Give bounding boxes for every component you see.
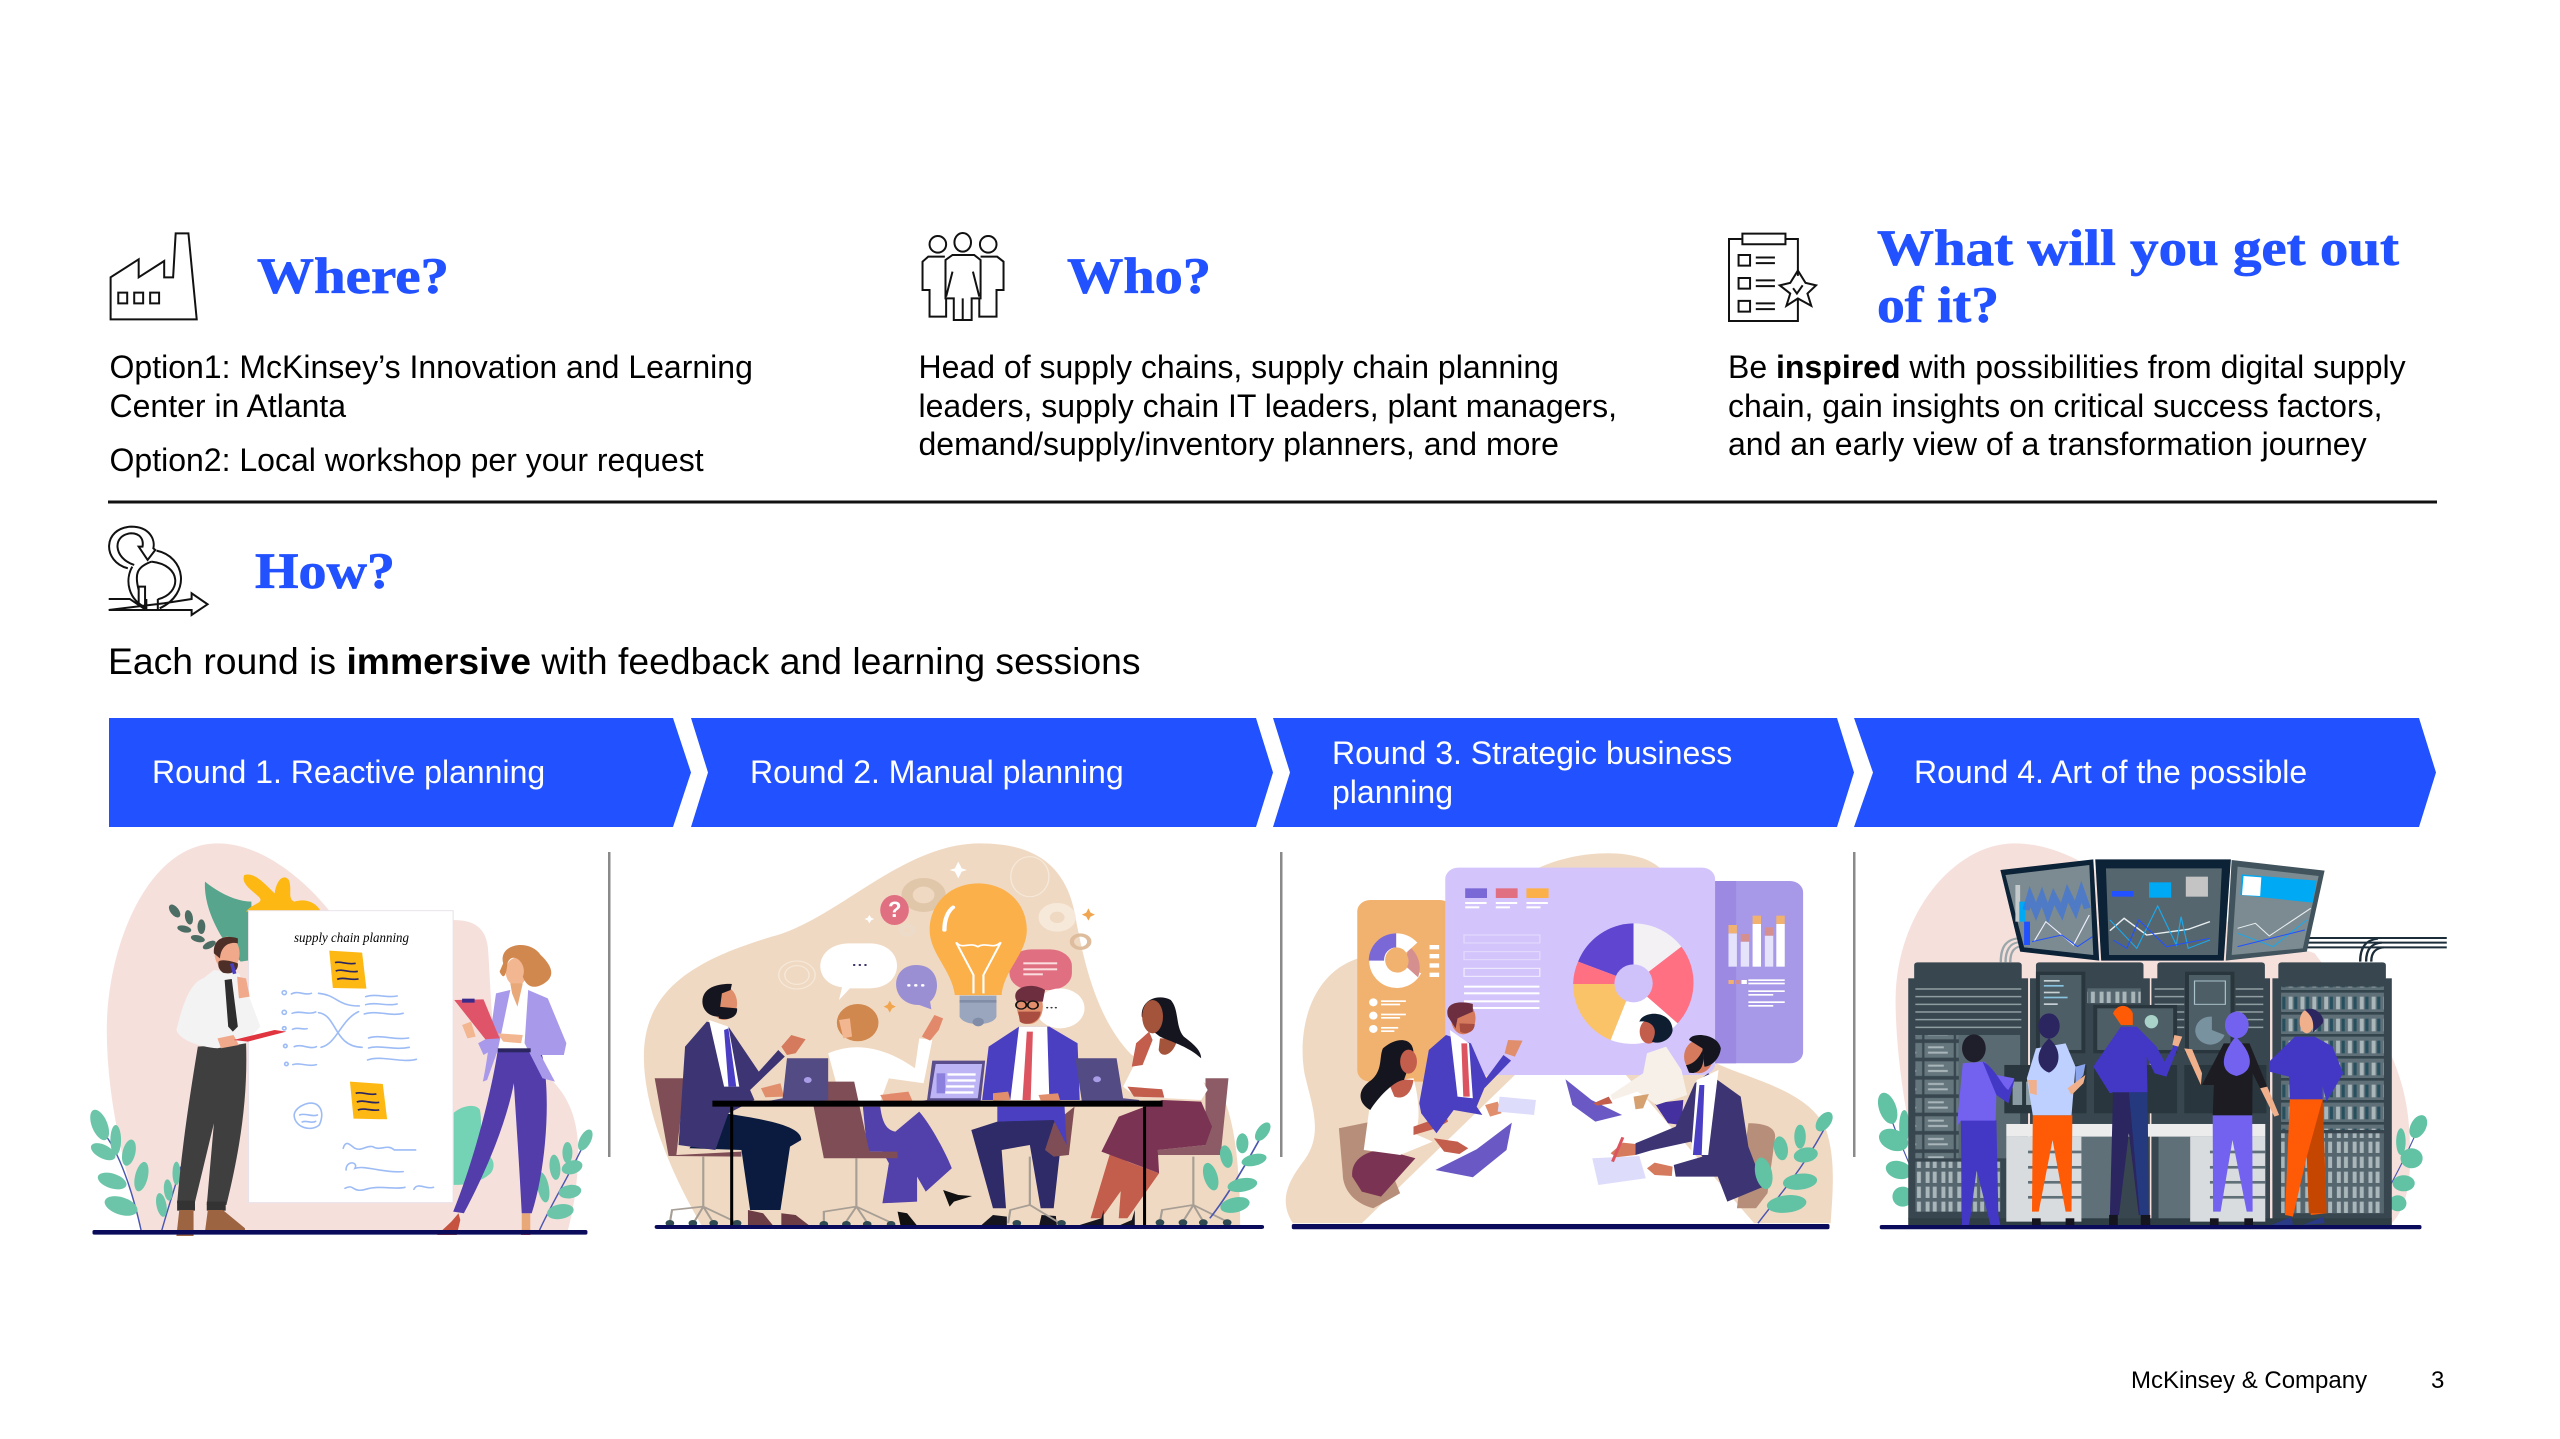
heading: what will you get out of it: of it? — [1877, 278, 1999, 334]
chevron: round 3 — [1273, 718, 1854, 827]
green leaves behind woman — [453, 1106, 494, 1185]
server racks — [1908, 962, 2392, 1226]
table occupants: right woman — [1080, 997, 1232, 1227]
icon: factory — [111, 233, 197, 319]
cables — [2001, 938, 2447, 962]
sparkles — [865, 862, 1095, 1013]
heading: who: Who? — [1067, 249, 1211, 305]
gears — [779, 882, 1089, 989]
woman with clipboard — [437, 945, 566, 1235]
right purple panel with bars — [1691, 881, 1803, 1063]
chevron: round 4 — [1854, 718, 2436, 827]
man standing left — [1419, 1002, 1536, 1133]
text block: who: demand/supply/inventory planners, and more — [918, 426, 1559, 462]
man with clipboard — [176, 937, 286, 1236]
laptops and papers — [1435, 1079, 1646, 1185]
table occupants: centre man — [971, 986, 1080, 1228]
person 3 — [2093, 1006, 2182, 1227]
left plant — [86, 1107, 181, 1232]
table occupants: left man — [655, 984, 809, 1227]
text: how description: Each round is immersive with feedback and learning sessions — [108, 640, 1141, 682]
beige background blob — [644, 843, 1240, 1227]
chevron: round 3: Round 3. Strategic business — [1332, 735, 1732, 771]
text block: where options: Option1: McKinsey’s Innovation and Learning — [110, 349, 753, 385]
text block: where options — [110, 349, 753, 478]
planning board — [249, 911, 453, 1203]
question mark: ? — [888, 897, 901, 922]
plant — [1752, 1109, 1836, 1223]
heading: what will you get out of it: What will you get out — [1877, 221, 2399, 277]
chevron: round 1: Round 1. Reactive planning — [152, 754, 545, 790]
white table — [1362, 1075, 1754, 1223]
laptops — [765, 1058, 1140, 1104]
table occupants: centre woman — [809, 1004, 972, 1228]
white console desk — [2006, 1124, 2265, 1222]
monitors — [2000, 859, 2325, 961]
ground line — [92, 1230, 587, 1235]
text block: what you get: chain, gain insights on critical success factors, — [1728, 388, 2383, 424]
plant — [1200, 1121, 1274, 1218]
illustration: round 4 art of the possible — [1874, 843, 2447, 1229]
board scribbles — [282, 991, 434, 1190]
table — [712, 1101, 1163, 1227]
woman right — [1593, 1014, 1687, 1125]
board title: supply chain planning — [294, 931, 409, 946]
icon: checklist with star — [1729, 234, 1816, 321]
right plant — [2368, 1113, 2431, 1227]
chevron: round 3: planning — [1332, 774, 1453, 810]
text block: what you get: Be inspired with possibilities from digital supply — [1728, 349, 2406, 385]
beige background blob — [1286, 853, 1833, 1223]
main purple panel — [1445, 868, 1715, 1075]
footer: 3 — [2431, 1367, 2444, 1394]
text block: who — [918, 349, 1617, 462]
person 1 — [1957, 1034, 2015, 1225]
chevron: round 2: Round 2. Manual planning — [750, 754, 1124, 790]
text block: what you get — [1728, 349, 2406, 462]
footer: McKinsey & Company — [2131, 1367, 2367, 1394]
left plant — [1874, 1091, 1933, 1227]
chevron: round 2 — [691, 718, 1273, 827]
woman left — [1352, 1040, 1468, 1197]
icon: iterative loop arrow — [109, 527, 208, 615]
chevron: round 4: Round 4. Art of the possible — [1914, 754, 2307, 790]
person 4 — [2184, 1012, 2279, 1227]
icon: people — [923, 233, 1004, 320]
illustration: round 2 manual planning — [644, 843, 1274, 1229]
seats — [1339, 1122, 1775, 1208]
tropical leaves behind board — [167, 874, 321, 962]
text block: who: leaders, supply chain IT leaders, plant managers, — [918, 388, 1617, 424]
light bulb — [930, 883, 1027, 1026]
ground line — [1292, 1224, 1830, 1229]
pink background blob — [1896, 843, 2410, 1225]
text block: who: Head of supply chains, supply chain planning — [918, 349, 1559, 385]
wall panels — [2004, 972, 2266, 1113]
person 2 — [2027, 1013, 2085, 1227]
heading: what will you get out of it — [1877, 221, 2399, 334]
ground line — [655, 1225, 1264, 1229]
ground line — [1880, 1225, 2421, 1229]
chevron: round 1 — [109, 718, 691, 827]
text block: what you get: and an early view of a transformation journey — [1728, 426, 2367, 462]
right plant — [535, 1127, 596, 1232]
speech bubbles — [820, 857, 1084, 1028]
orange panel — [1357, 900, 1453, 1082]
person 5 — [2269, 1009, 2343, 1226]
text block: where options: Center in Atlanta — [110, 388, 346, 424]
pink background blob — [107, 843, 578, 1232]
man right — [1611, 1035, 1764, 1202]
heading: where: Where? — [257, 249, 449, 305]
heading: how: How? — [255, 544, 395, 600]
illustration: round 1 reactive planning — [86, 843, 596, 1236]
pie chart — [1573, 923, 1694, 1044]
illustration: round 3 strategic business planning — [1286, 853, 1836, 1229]
text block: where options: Option2: Local workshop per your request — [110, 442, 704, 478]
